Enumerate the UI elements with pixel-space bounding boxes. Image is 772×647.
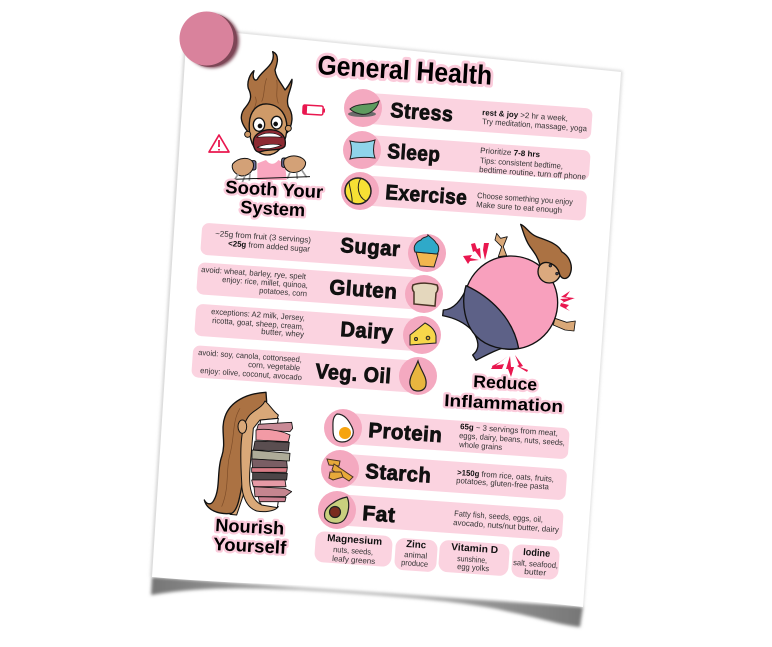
panel: Sugar <box>200 223 446 272</box>
panel: Zinc: animal <box>404 550 428 561</box>
panel: Zinc: Zinc <box>406 539 427 551</box>
panel: Sleep: Sleep <box>387 140 441 167</box>
panel: Sleep <box>343 131 591 181</box>
panel: Gluten: potatoes, corn <box>259 286 307 298</box>
panel: Gluten: Gluten <box>329 276 398 304</box>
panel: Zinc: produce <box>401 558 429 569</box>
panel: Exercise: Choose something you enjoy <box>477 191 573 207</box>
panel: Gluten: enjoy: rice, millet, quinoa, <box>222 275 308 290</box>
panel: Exercise: Exercise <box>385 181 468 210</box>
panel: Iodine <box>511 544 560 580</box>
illustration: woman eating big sandwich <box>204 392 293 515</box>
icon: low battery <box>303 105 325 115</box>
hair <box>204 392 267 514</box>
panel: Magnesium: Magnesium <box>327 533 383 548</box>
panel: Fat: Fat <box>362 502 396 527</box>
face <box>241 401 278 512</box>
panel: Sugar: <25g from added sugar <box>228 239 311 254</box>
panel: Vitamin D: Vitamin D <box>451 542 498 556</box>
head <box>249 104 287 155</box>
illustration: inflated woman <box>443 224 575 360</box>
panel: Veg. Oil <box>191 345 437 395</box>
panel: Veg. Oil: enjoy: olive, coconut, avocado <box>200 366 303 382</box>
heading: Sooth Your System <box>225 177 324 220</box>
panel: Sugar: Sugar <box>340 234 401 261</box>
heading: Nourish Yourself: Yourself <box>213 534 288 558</box>
icon: oil drop <box>410 361 426 391</box>
panel: Dairy <box>194 304 441 354</box>
panel: Starch: >150g from rice, oats, fruits, <box>457 468 554 484</box>
panel: Starch: Starch <box>365 460 432 488</box>
panel: Dairy: ricotta, goat, sheep, cream, <box>212 316 304 331</box>
icon: warning triangle <box>209 135 229 152</box>
paper shadow <box>151 28 621 627</box>
illustration: stressed woman <box>232 52 310 182</box>
paper sheet <box>152 28 621 607</box>
panel: Magnesium <box>314 531 393 567</box>
panel: Stress: Try meditation, massage, yoga <box>482 117 588 133</box>
heading: Reduce Inflammation <box>444 372 564 416</box>
panel: Fat: Fatty fish, seeds, eggs, oil, <box>454 509 543 524</box>
icon: leaf <box>348 101 379 117</box>
panel: Stress: rest & joy >2 hr a week, <box>482 108 568 123</box>
hands <box>249 161 256 170</box>
icon: fried egg <box>333 414 353 442</box>
hair <box>521 224 571 278</box>
panel: Zinc <box>394 538 438 572</box>
panel: Vitamin D: egg yolks <box>457 562 489 573</box>
icon: tennis ball <box>345 178 371 204</box>
panel: Starch: potatoes, gluten-free pasta <box>456 476 550 492</box>
panel: Sleep: Tips: consistent bedtime, <box>480 156 563 171</box>
pin <box>180 12 239 68</box>
icon: avocado <box>325 497 349 523</box>
panel: Vitamin D <box>438 540 510 576</box>
panel: Veg. Oil: avoid: soy, canola, cottonseed, <box>198 348 302 364</box>
icon: fries <box>327 459 353 481</box>
sandwich stack <box>252 422 293 502</box>
panel: Stress <box>344 89 593 139</box>
title: General Health <box>317 50 493 91</box>
shirt <box>257 160 287 180</box>
head <box>538 260 561 283</box>
panel: Fat: avocado, nuts/nut butter, dairy <box>453 518 559 534</box>
panel: Protein <box>324 409 570 459</box>
panel: Iodine: butter <box>524 567 547 578</box>
panel: Iodine: salt, seafood, <box>513 558 558 570</box>
panel: Sugar: ~25g from fruit (3 servings) <box>215 229 312 245</box>
panel: Gluten: avoid: wheat, barley, rye, spelt <box>201 265 307 281</box>
mouth <box>253 130 285 152</box>
panel: Iodine: Iodine <box>523 547 551 560</box>
icon: cupcake <box>414 235 439 267</box>
panel: Dairy: exceptions: A2 milk, Jersey, <box>211 307 305 323</box>
icon: red pain bolts <box>463 243 575 377</box>
heading: Nourish Yourself: Nourish <box>215 515 285 539</box>
panel: Exercise: Make sure to eat enough <box>476 200 562 215</box>
panel: Protein: 65g ~ 3 servings from meat, <box>460 422 558 438</box>
limbs <box>495 233 507 257</box>
panel: Sleep: bedtime routine, turn off phone <box>479 165 587 181</box>
heading: Reduce Inflammation: Reduce <box>473 372 538 394</box>
panel: Gluten <box>196 262 443 313</box>
neck and shoulder <box>230 468 243 515</box>
heading: Nourish Yourself <box>213 515 288 558</box>
icon: pillow <box>350 140 375 159</box>
hair <box>241 52 292 133</box>
icon: cheese <box>410 323 436 345</box>
panel: Vitamin D: sunshine, <box>457 554 487 565</box>
heading: Sooth Your System: System <box>240 197 306 220</box>
panel: Fat <box>318 491 564 541</box>
panel: Dairy: butter, whey <box>261 327 304 339</box>
panel: Dairy: Dairy <box>340 318 394 345</box>
icon: bread <box>412 283 438 306</box>
panel: Protein: eggs, dairy, beans, nuts, seeds, <box>459 431 565 447</box>
heading: Reduce Inflammation: Inflammation <box>444 391 564 416</box>
panel: Veg. Oil: Veg. Oil <box>315 360 392 388</box>
panel: Protein: whole grains <box>458 440 502 452</box>
panel: Stress: Stress <box>390 99 454 126</box>
panel: Protein: Protein <box>368 419 443 447</box>
panel: Exercise <box>341 172 587 221</box>
scratch marks <box>234 170 307 182</box>
eyes <box>253 118 265 131</box>
panel: Magnesium: nuts, seeds, <box>333 545 373 557</box>
panel: Starch <box>321 450 567 500</box>
heading: Sooth Your System: Sooth Your <box>225 177 324 202</box>
panel: Veg. Oil: corn, vegetable <box>248 360 301 373</box>
panel: Sleep: Prioritize 7-8 hrs <box>480 146 541 159</box>
body <box>464 256 558 349</box>
panel: Magnesium: leafy greens <box>332 554 375 566</box>
